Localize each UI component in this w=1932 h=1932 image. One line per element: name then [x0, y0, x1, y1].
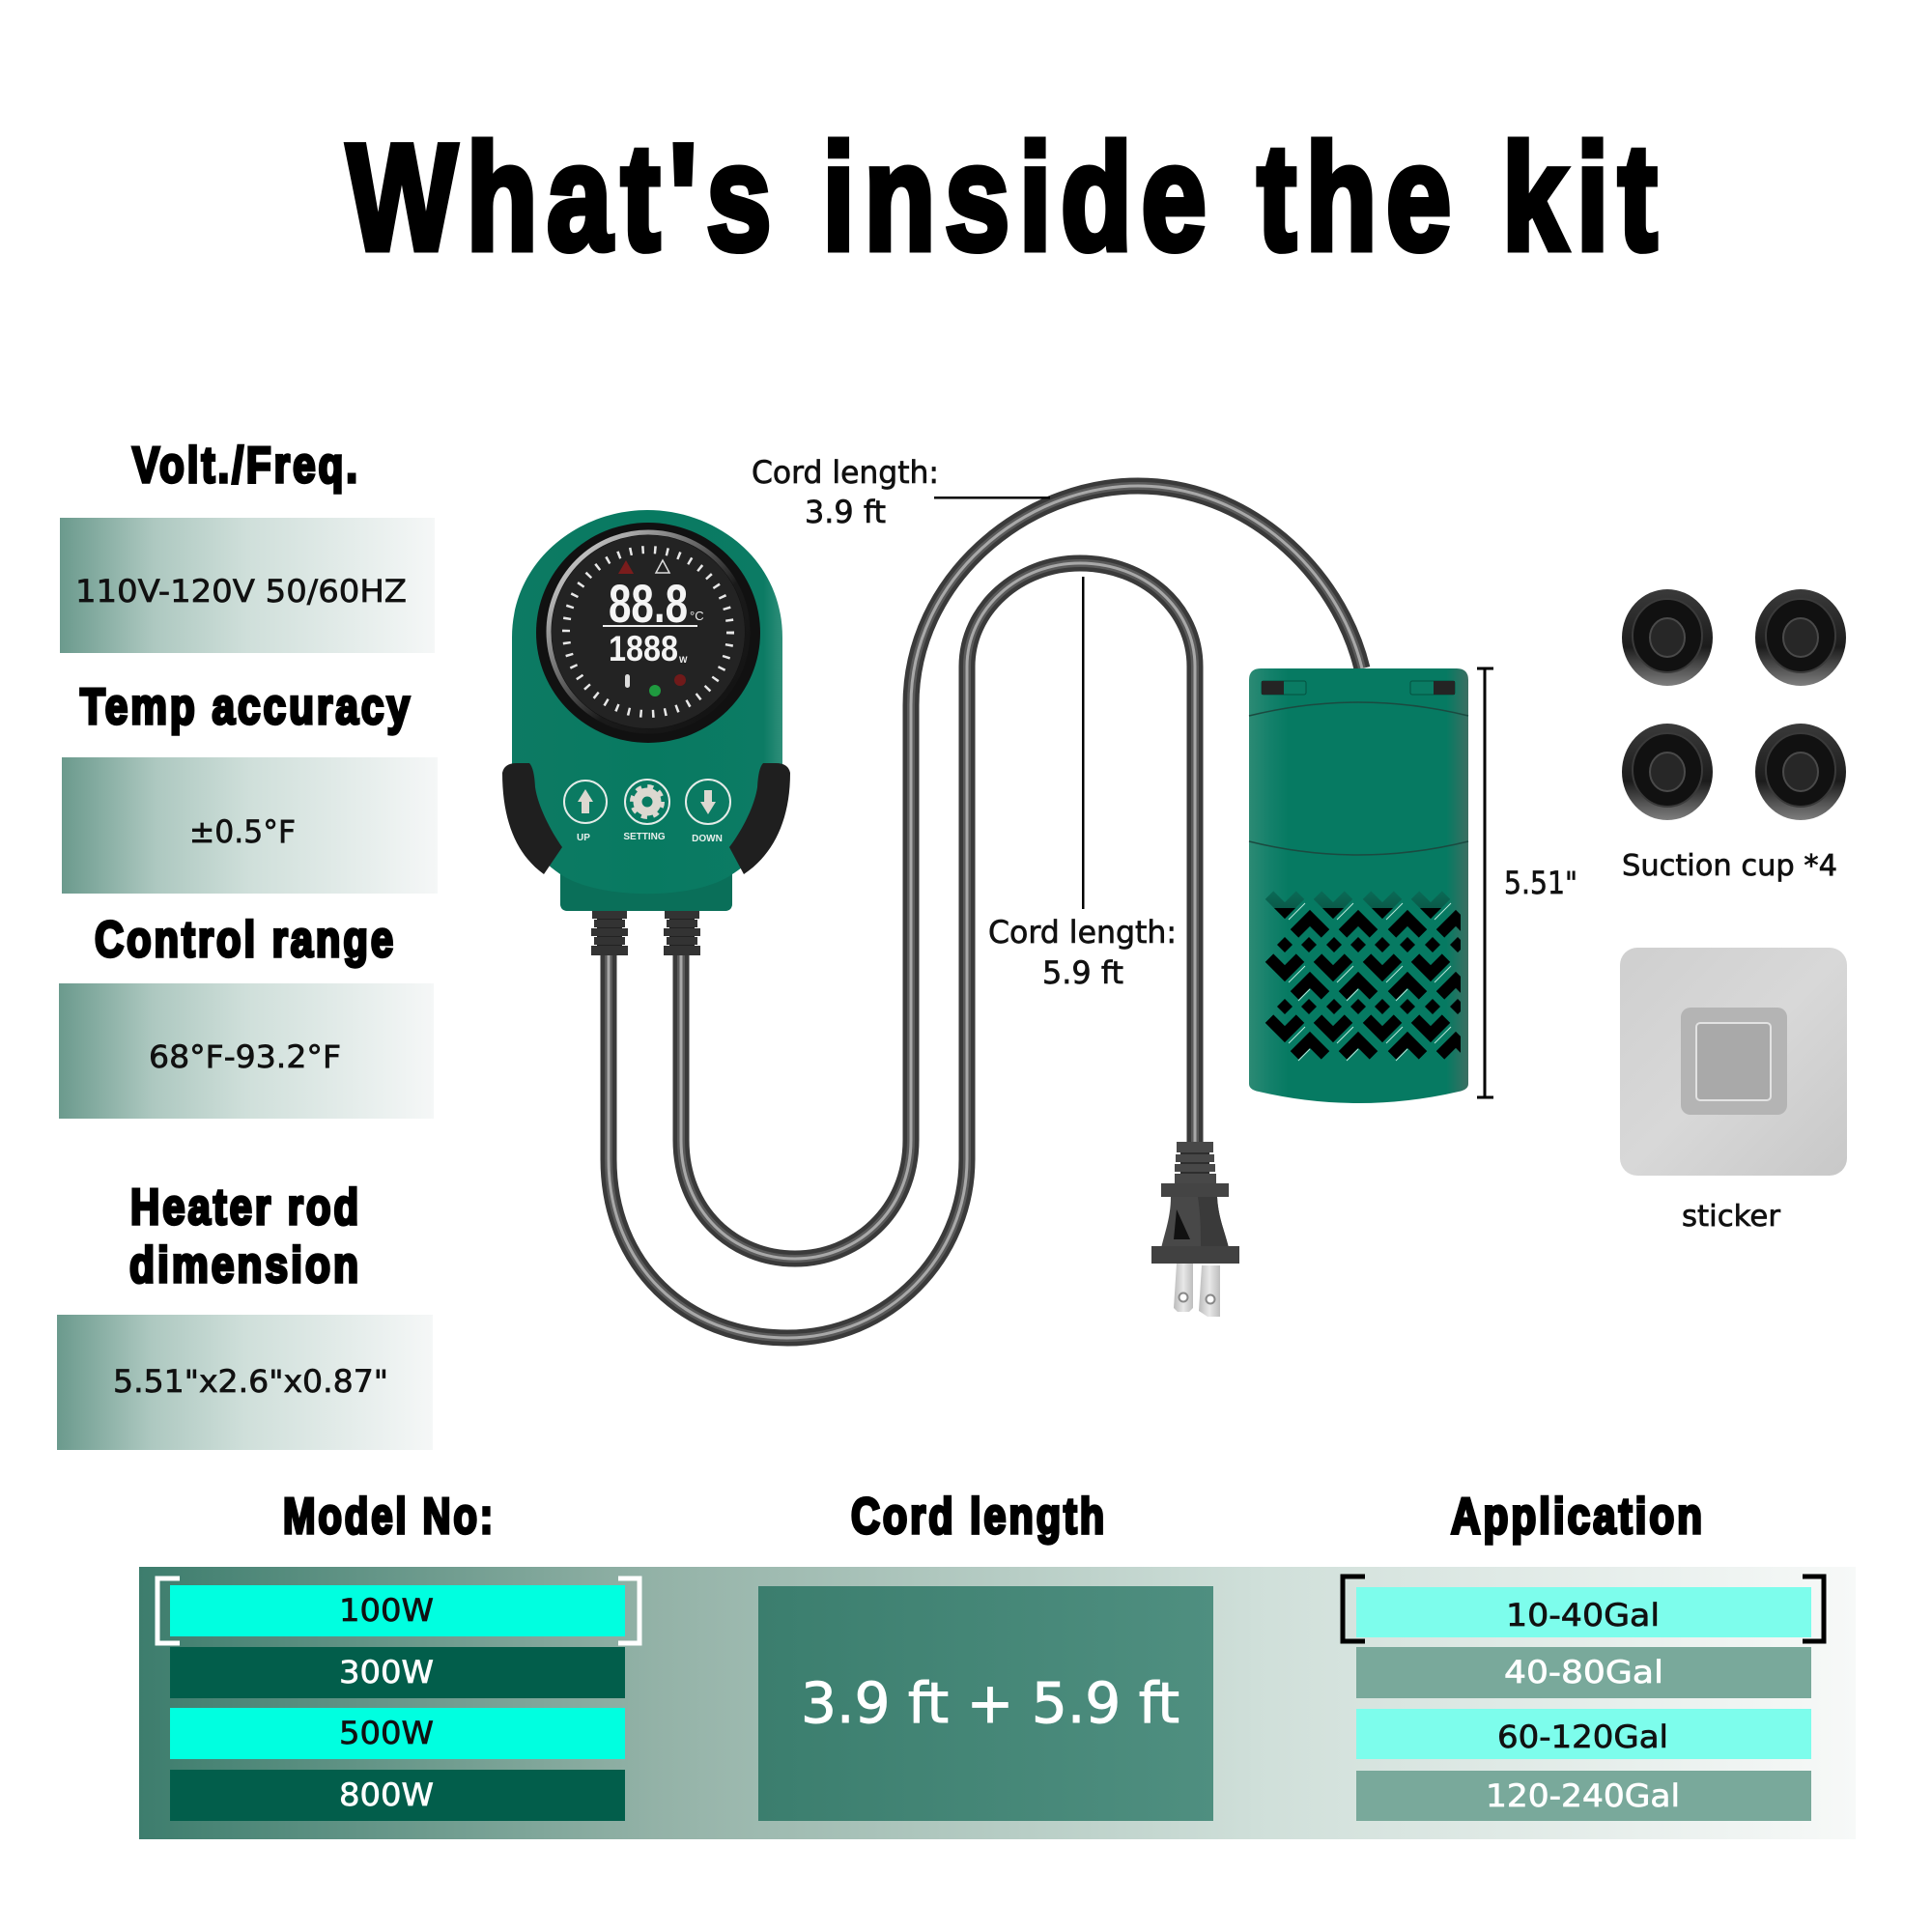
white selection brackets [157, 1578, 639, 1643]
heater body [1249, 668, 1468, 1103]
unit C: °C [690, 609, 704, 623]
callout: cord length 5.9 ft: Cord length: [988, 914, 1177, 951]
heater rod [1249, 668, 1471, 1103]
seams [1249, 702, 1468, 855]
cord: 3.9 ft to heater [681, 486, 1362, 1259]
panel: heater rod dimension [57, 1179, 433, 1450]
row 300W: 300W [339, 1654, 434, 1690]
icon: sticker [1620, 948, 1847, 1176]
down button [686, 780, 730, 824]
row 40-80Gal: 40-80Gal [1504, 1654, 1663, 1690]
row 800W: 800W [339, 1776, 434, 1813]
dimension label: 5.51" [1504, 865, 1577, 901]
right clip [729, 763, 790, 874]
row 100W: 100W [339, 1592, 434, 1629]
row 500W [170, 1708, 625, 1759]
dimension bracket: 5.51 inches [1477, 668, 1577, 1097]
heading: Heater rod dimension: Heater rod [130, 1179, 361, 1236]
panel: control range [59, 912, 434, 1119]
value text: 5.51"x2.6"x0.87" [113, 1363, 388, 1400]
green housing [512, 510, 782, 911]
suction cup 1 [1622, 589, 1713, 686]
row 100W [170, 1585, 625, 1636]
panel: temperature accuracy [62, 679, 438, 894]
dial [536, 523, 760, 743]
cord: 5.9 ft to plug [609, 563, 1195, 1338]
value text: 110V-120V 50/60HZ [75, 573, 407, 610]
icon group: suction cups [1622, 589, 1846, 820]
plug ribs [1175, 1142, 1216, 1185]
plug body shading [1198, 1197, 1229, 1248]
plug body [1161, 1197, 1229, 1248]
button labels: UP [577, 833, 590, 843]
warning triangles [618, 560, 634, 574]
temperature readout: 88.8 [609, 573, 688, 634]
heading: Volt./Freq.: Volt./Freq. [132, 438, 360, 494]
vent pattern [1269, 895, 1471, 1061]
heading: Temp accuracy: Temp accuracy [80, 679, 412, 735]
value box [57, 1315, 433, 1450]
callout: cord length 5.9 ft: 5.9 ft [1042, 954, 1123, 991]
row 10-40Gal [1356, 1587, 1811, 1637]
plug collar [1161, 1183, 1229, 1197]
callout: cord length 3.9 ft [752, 454, 1050, 530]
label: suction cup: Suction cup *4 [1622, 849, 1837, 883]
heading: Model No: Model No: [283, 1489, 496, 1545]
value text: 68°F-93.2°F [149, 1038, 341, 1075]
strain reliefs [591, 911, 700, 955]
label: sticker: sticker [1682, 1200, 1781, 1234]
plug base [1151, 1246, 1239, 1264]
heading: Cord length: Cord length [851, 1489, 1107, 1545]
black selection brackets [1343, 1577, 1824, 1641]
button labels: DOWN [692, 834, 723, 844]
row 120-240Gal [1356, 1771, 1811, 1821]
plug prongs [1174, 1264, 1220, 1317]
suction cup 3 [1622, 724, 1713, 820]
up button [564, 781, 607, 823]
status icons [625, 674, 630, 688]
controller unit [502, 510, 790, 955]
row 60-120Gal: 60-120Gal [1497, 1719, 1668, 1755]
heading: Control range: Control range [95, 912, 396, 968]
unit W: W [679, 655, 688, 665]
value box [60, 518, 435, 653]
callout: cord length 3.9 ft: Cord length: [752, 454, 939, 491]
plug grip notch [1174, 1209, 1190, 1239]
value box [62, 757, 438, 894]
button labels [577, 832, 723, 844]
row 10-40Gal: 10-40Gal [1506, 1597, 1660, 1634]
cord length box [758, 1586, 1213, 1821]
button labels: SETTING [623, 832, 666, 842]
callout: cord length 3.9 ft: 3.9 ft [805, 494, 886, 530]
application list [1343, 1577, 1824, 1821]
panel: voltage and frequency [60, 438, 435, 653]
row 40-80Gal [1356, 1647, 1811, 1698]
plug [1151, 1142, 1239, 1317]
row 300W [170, 1647, 625, 1698]
heading: Application: Application [1451, 1489, 1705, 1545]
divider [603, 625, 697, 627]
value box [59, 983, 434, 1119]
setting button [625, 780, 669, 824]
row 500W: 500W [339, 1715, 434, 1751]
row 60-120Gal [1356, 1709, 1811, 1759]
suction cup 2 [1755, 589, 1846, 686]
suction cup 4 [1755, 724, 1846, 820]
cord length box: 3.9 ft + 5.9 ft [801, 1670, 1179, 1736]
power readout: 1888 [609, 629, 678, 668]
row 800W [170, 1770, 625, 1821]
left clip [502, 763, 562, 874]
top slots [1262, 681, 1455, 695]
lower tab shading [560, 874, 732, 911]
row 120-240Gal: 120-240Gal [1486, 1777, 1680, 1814]
callout: cord length 5.9 ft [988, 577, 1177, 991]
value text: ±0.5°F [189, 813, 296, 850]
model list [157, 1578, 639, 1821]
heading second line: dimension [129, 1237, 361, 1293]
panel: specification band [139, 1567, 1856, 1839]
